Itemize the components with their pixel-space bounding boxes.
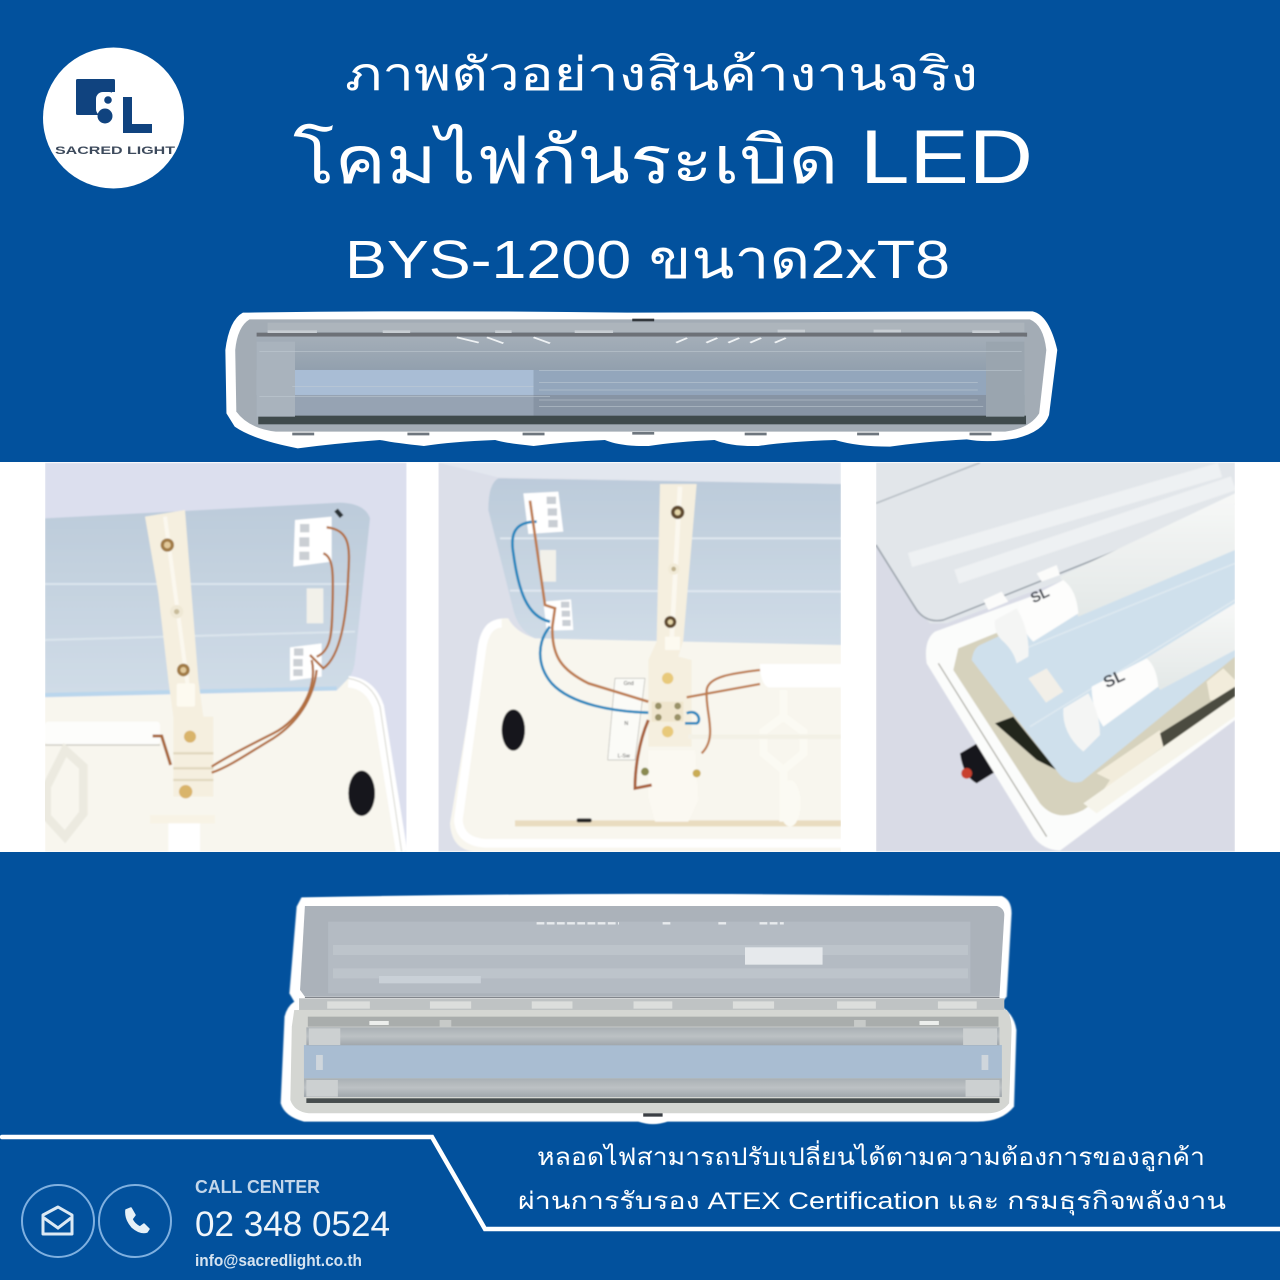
photo: wiring, centre view [438,463,841,852]
icon: phone [99,1185,171,1257]
lamp holders [523,492,563,534]
footer note line 2: ผ่านการรับรอง ATEX Certification และ กรมธุรกิจพลังงาน [518,1188,1226,1216]
housing [450,618,841,852]
reflector plate [45,503,370,696]
LED tube lower [1143,603,1235,690]
photo: tubes installed, angled view: SL [1100,666,1128,692]
title line 1: ภาพตัวอย่างสินค้างานจริง [345,48,978,100]
lamp holders [293,517,332,567]
black gland [960,742,998,783]
photo: closed lamp fixture [225,311,1057,448]
brown wires [530,501,648,702]
LED tube upper [1060,493,1235,617]
photo: open lamp fixture [281,894,1016,1124]
photo: tubes installed, angled view: SL [1028,585,1052,607]
contact: call center label: CALL CENTER [195,1177,320,1197]
reflector plate [488,478,841,647]
bracket [648,484,697,747]
contact: email: info@sacredlight.co.th [195,1251,362,1270]
tube lower [304,1078,1002,1097]
footer note line 1: หลอดไฟสามารถปรับเปลี่ยนได้ตามความต้องการของลูกค้า [537,1140,1205,1172]
base [290,1010,1012,1113]
lid [300,906,1004,997]
sticker pad [1028,668,1063,703]
conduit and frame [760,664,841,687]
logo: Sacred Light [43,48,184,188]
photo: wiring, centre view: N [624,721,628,727]
black grommet [348,771,375,816]
housing [926,597,1235,851]
photo: wiring, centre view: Gnd [624,681,634,687]
title line 2: โคมไฟกันระเบิด LED [293,115,1033,200]
contact: phone number: 02 348 0524 [195,1205,390,1244]
title line 3: model: BYS-1200 ขนาด2xT8 [345,230,950,290]
black grommet [502,709,525,751]
dark cavity under plate [995,717,1057,770]
brown wires [310,527,349,668]
clips and edge [983,592,1008,610]
icon: email [22,1185,94,1257]
photo: tubes installed, angled view [876,463,1235,852]
open clear lid [876,463,1235,623]
tube upper [306,1027,999,1045]
housing [45,677,406,852]
photo: wiring, centre view: L-Sw [618,754,630,760]
logo: Sacred Light: SACRED LIGHT [55,145,175,157]
switch [654,820,689,822]
reflector plate [972,527,1235,782]
photo: wiring, left view [45,463,407,852]
hinges [299,998,1004,1010]
bracket [145,510,213,797]
footer outline [2,1137,1280,1229]
white photo band [0,462,1280,852]
conduit [45,722,160,744]
blue wires [512,522,550,622]
label card [608,678,645,760]
